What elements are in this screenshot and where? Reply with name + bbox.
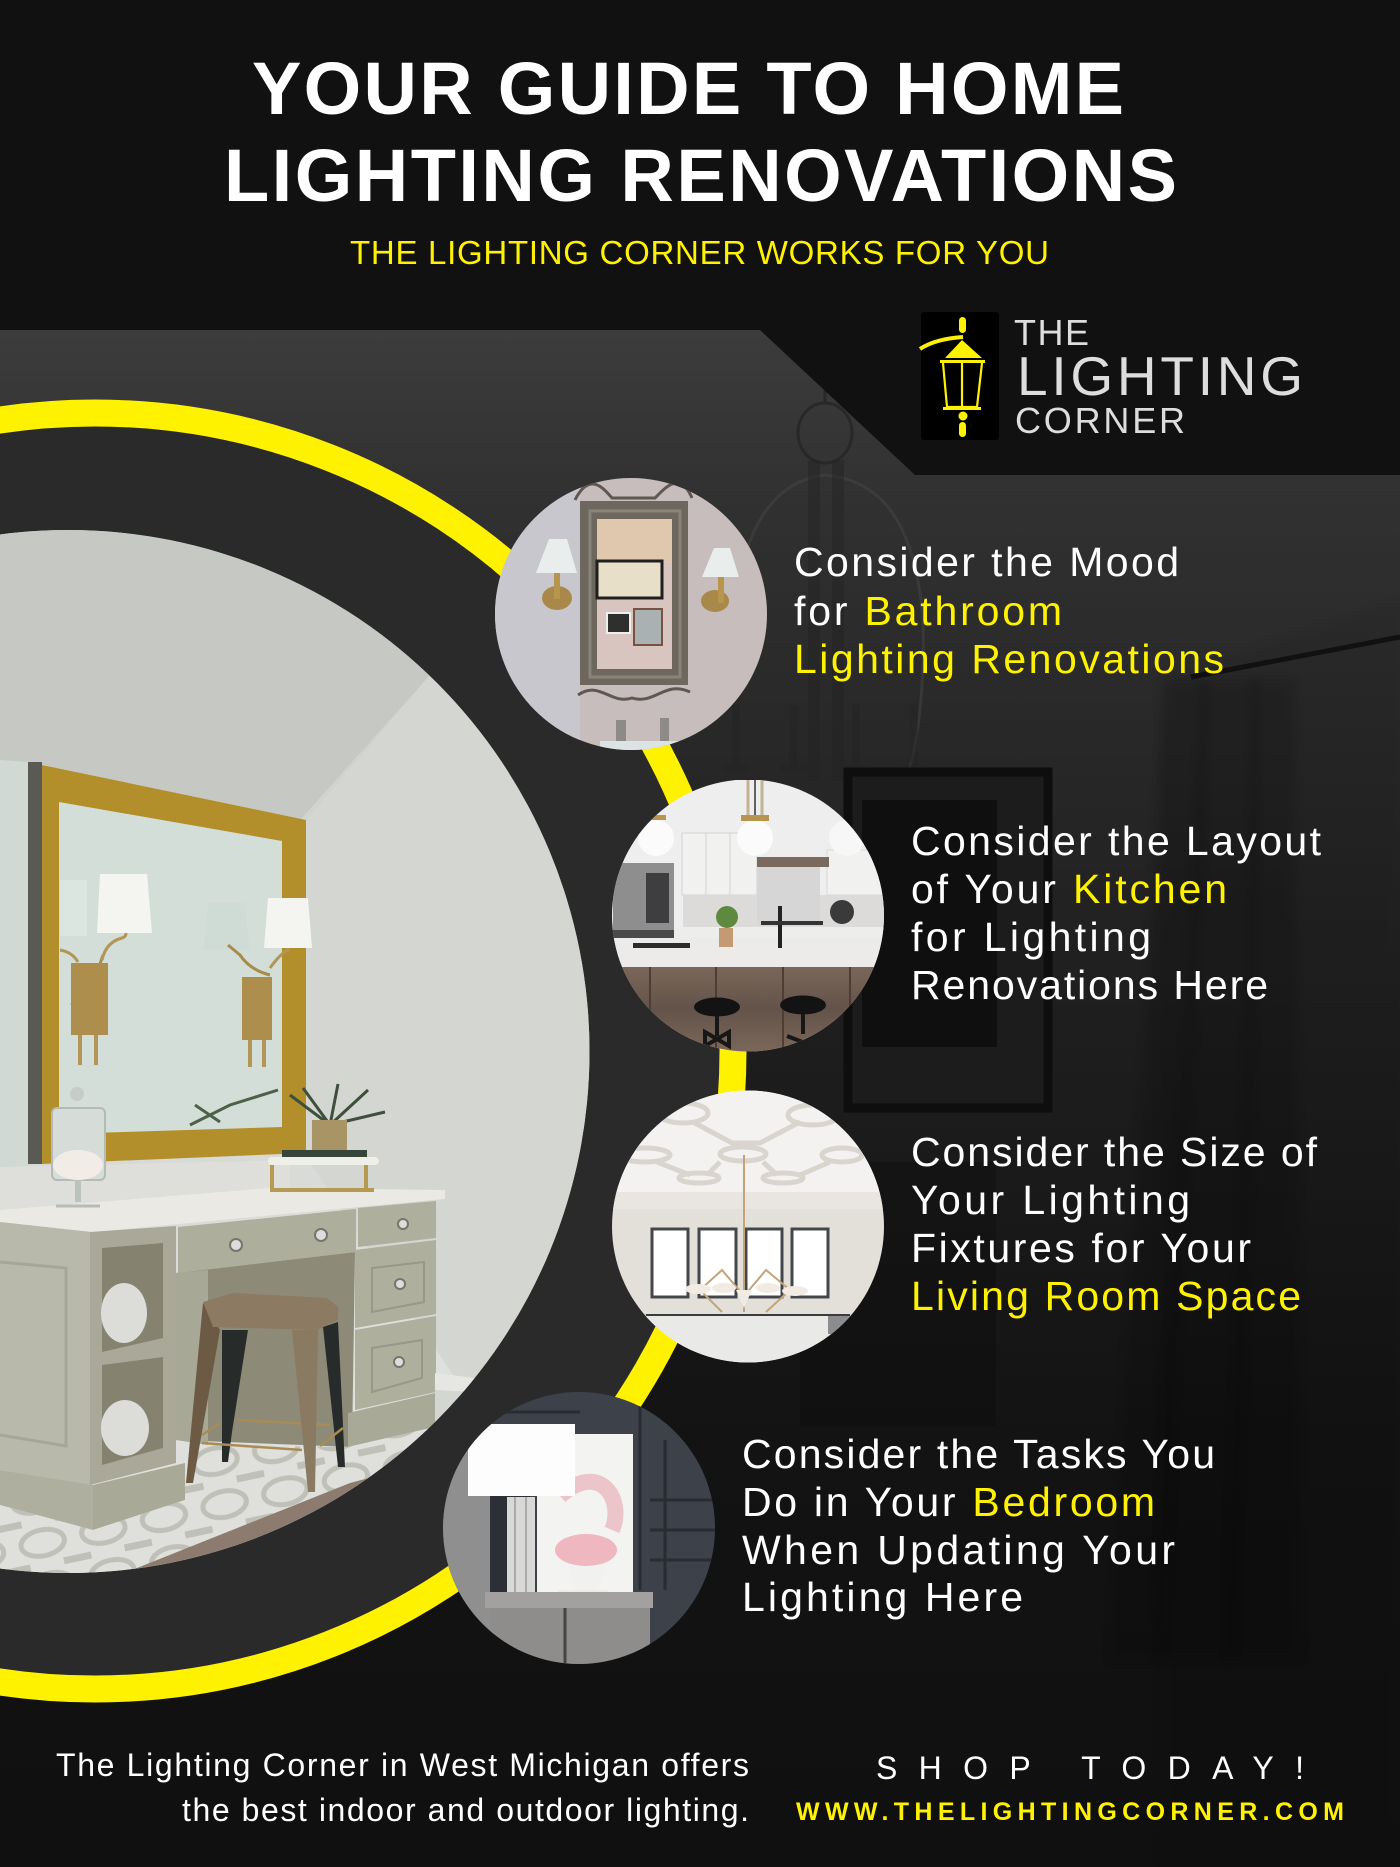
footer description: the best indoor and outdoor lighting. bbox=[182, 1792, 749, 1828]
step text: bedroom bbox=[742, 1431, 1215, 1620]
step text: living room: Fixtures for Your bbox=[911, 1225, 1251, 1271]
step text: bathroom: for Bathroom bbox=[794, 588, 1062, 634]
photo circle: bathroom sconces bbox=[495, 478, 767, 753]
step text: bedroom: When Updating Your bbox=[742, 1527, 1175, 1573]
step text: bathroom: Lighting Renovations bbox=[794, 636, 1224, 682]
baseboard bbox=[435, 1373, 475, 1392]
step text: kitchen: for Lighting bbox=[911, 914, 1151, 960]
subtitle: THE LIGHTING CORNER WORKS FOR YOU bbox=[350, 234, 1049, 271]
stool bbox=[186, 1293, 345, 1492]
step text: living room: Consider the Size of bbox=[911, 1129, 1318, 1175]
photo circle: living room ceiling and chandelier bbox=[612, 1090, 884, 1364]
yellow ring with dark disc bbox=[0, 413, 733, 1689]
dark picture frame on the back wall bbox=[848, 772, 1048, 1108]
call to action: SHOP TODAY! bbox=[876, 1750, 1304, 1786]
step text: bedroom: Lighting Here bbox=[742, 1574, 1023, 1620]
floor bbox=[0, 1428, 428, 1573]
title bbox=[224, 47, 1177, 217]
step text: living room: Living Room Space bbox=[911, 1273, 1301, 1319]
step text: bathroom bbox=[794, 539, 1224, 682]
icon: lantern bbox=[920, 312, 999, 440]
photo circle: kitchen bbox=[612, 780, 884, 1052]
main photo: bathroom vanity bbox=[0, 520, 600, 1600]
step text: living room bbox=[911, 1129, 1318, 1319]
footer description bbox=[56, 1747, 749, 1828]
title: LIGHTING RENOVATIONS bbox=[224, 134, 1177, 217]
logo: LIGHTING bbox=[1017, 345, 1303, 407]
step text: kitchen bbox=[911, 818, 1322, 1008]
towels bbox=[101, 1283, 149, 1456]
mirror bbox=[0, 760, 312, 1167]
step text: bedroom: Do in Your Bedroom bbox=[742, 1479, 1155, 1525]
step text: bedroom: Consider the Tasks You bbox=[742, 1431, 1215, 1477]
title: YOUR GUIDE TO HOME bbox=[252, 47, 1124, 130]
glass jar bbox=[52, 1087, 105, 1206]
step text: kitchen: of Your Kitchen bbox=[911, 866, 1227, 912]
call to action bbox=[796, 1750, 1344, 1826]
logo: CORNER bbox=[1015, 400, 1185, 441]
cabinet bbox=[0, 1201, 436, 1530]
counter bbox=[0, 1188, 445, 1232]
header band bbox=[0, 0, 1400, 475]
photo circle: bedroom lamp bbox=[443, 1392, 715, 1668]
step text: bathroom: Consider the Mood bbox=[794, 539, 1179, 585]
logo bbox=[920, 312, 1303, 441]
backsplash bbox=[14, 1166, 28, 1167]
step text: kitchen: Renovations Here bbox=[911, 962, 1268, 1008]
step text: living room: Your Lighting bbox=[911, 1177, 1190, 1223]
footer description: The Lighting Corner in West Michigan offers bbox=[56, 1747, 749, 1783]
tray and plant bbox=[190, 1084, 385, 1190]
logo: THE bbox=[1014, 312, 1089, 353]
call to action: WWW.THELIGHTINGCORNER.COM bbox=[796, 1798, 1344, 1826]
step text: kitchen: Consider the Layout bbox=[911, 818, 1322, 864]
